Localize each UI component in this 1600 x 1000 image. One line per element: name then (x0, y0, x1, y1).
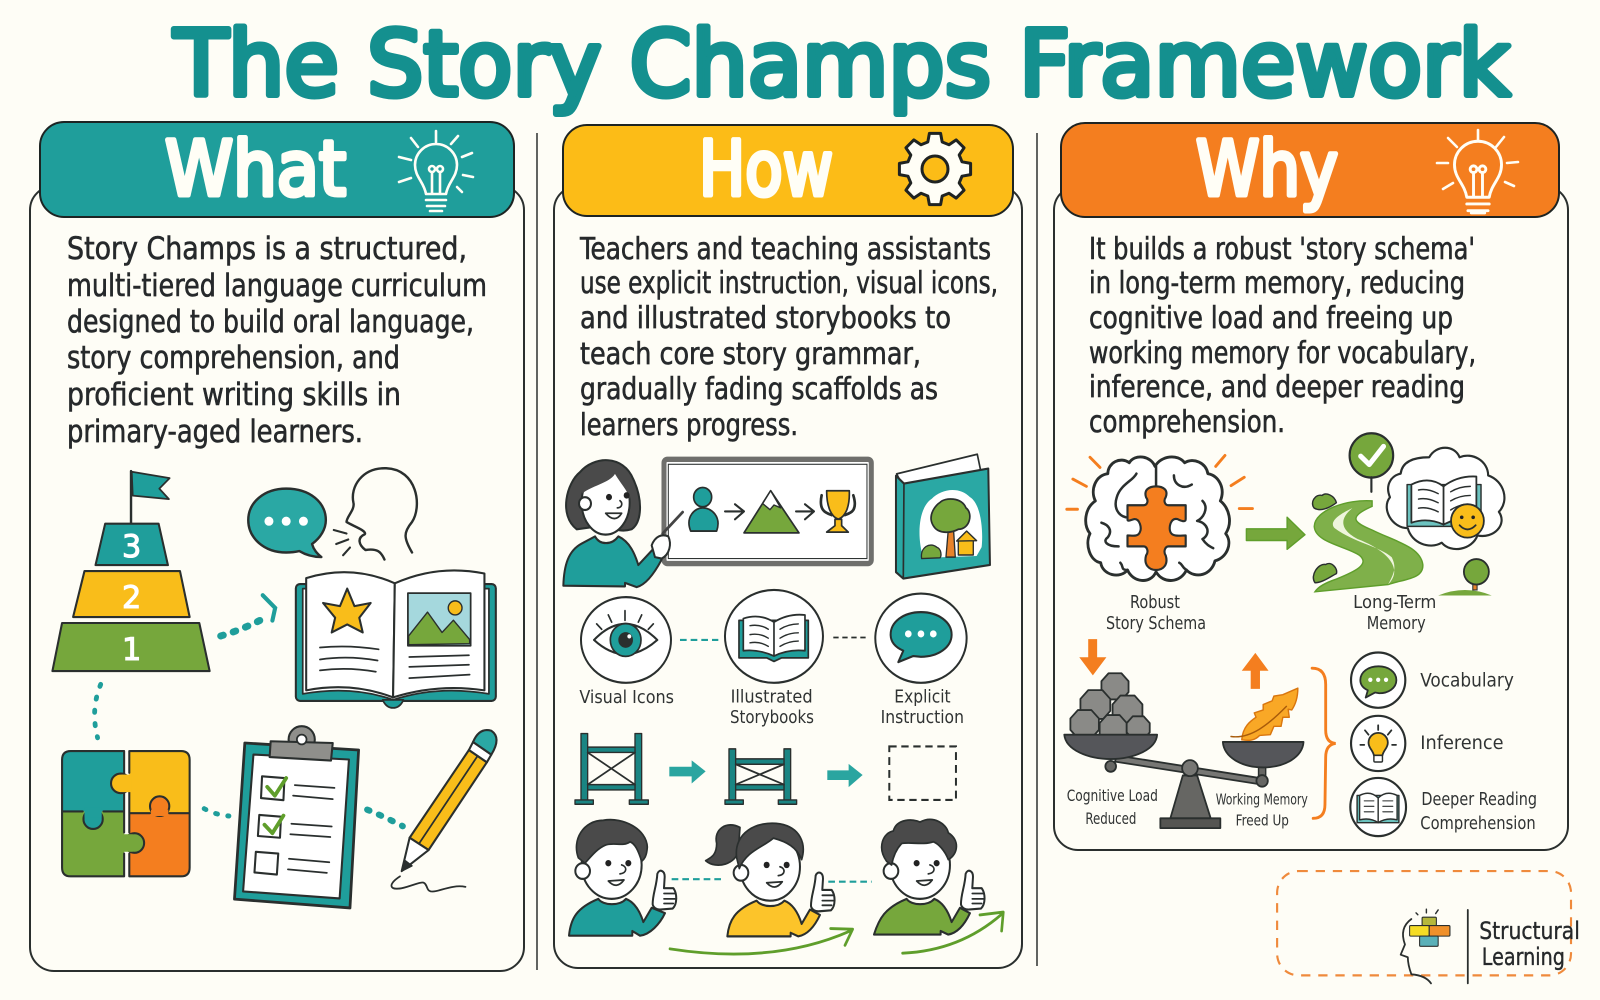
title: The Story Champs Framework (173, 12, 1510, 117)
logo: Structural Learning (1401, 909, 1580, 983)
label: Illustrated Storybooks: Illustrated (731, 687, 813, 708)
icon: puzzle pieces (62, 751, 190, 876)
icon: tiered pyramid with flag: 2 (122, 581, 141, 616)
header: How: How (699, 124, 833, 213)
logo: dashed box (1277, 871, 1571, 975)
header: Why: Why (1196, 124, 1338, 213)
icon: teacher pointing (563, 460, 683, 587)
icon: reading book (1350, 778, 1406, 836)
icon: clipboard checklist (234, 726, 359, 908)
icon: tiered pyramid with flag: 1 (122, 633, 141, 668)
logo: Structural Learning: Learning (1482, 943, 1565, 971)
label: Working Memory Freed Up: Working Memory (1216, 790, 1308, 809)
icon: green check pin (1350, 433, 1393, 492)
arrow: dotted puzzle to clipboard (204, 809, 229, 816)
text block: How description: Teachers and teaching assistants (579, 232, 991, 267)
arrow: scaffold fading 1 (669, 760, 706, 784)
icon: speech bubble in circle (875, 594, 967, 683)
arrow: schema to memory (1246, 517, 1305, 549)
icon: thought cloud with book (1387, 448, 1504, 549)
header: What: What (165, 124, 346, 213)
text block: How description: and illustrated storybooks to (580, 301, 951, 336)
label: Long-Term Memory: Memory (1367, 614, 1426, 634)
icon: pencil (391, 730, 497, 892)
text block: How description: gradually fading scaffolds as (580, 372, 938, 407)
arrow: progress 1 (670, 929, 853, 954)
text block: What description: story comprehension, and (67, 340, 400, 376)
icon: open storybook (296, 570, 496, 708)
header: How (563, 124, 1013, 216)
label: Cognitive Load Reduced: Reduced (1085, 809, 1136, 828)
label: Deeper Reading Comprehension (1420, 789, 1537, 834)
label: Robust Story Schema: Story Schema (1106, 614, 1206, 634)
label: Long-Term Memory: Long-Term (1353, 593, 1436, 613)
icon: child in green (874, 820, 985, 935)
arrow: progress 2 (903, 912, 1003, 953)
label: Working Memory Freed Up: Freed Up (1236, 811, 1289, 830)
text block: Why description: cognitive load and freeing up (1089, 301, 1453, 336)
icon: dashed empty box (889, 746, 956, 800)
text block: Why description: comprehension. (1089, 405, 1285, 440)
icon: story board (664, 459, 871, 564)
label: Explicit Instruction: Explicit (894, 687, 951, 708)
illustrations: Why (1064, 433, 1580, 983)
text block: How description: use explicit instruction, visual icons, (580, 266, 998, 301)
label: Robust Story Schema (1106, 593, 1206, 634)
icon: open book (725, 590, 823, 683)
icon: inference bulb (1351, 716, 1405, 771)
text block: Why description (1089, 232, 1476, 440)
label: Vocabulary: Vocabulary (1420, 670, 1514, 691)
label: Cognitive Load Reduced (1067, 786, 1158, 828)
icon: light bulb (399, 131, 473, 211)
panel: What (30, 122, 524, 971)
arrow: dotted clipboard to pencil (367, 810, 403, 826)
text block: What description: proficient writing skills in (67, 377, 401, 413)
icon: eye (581, 597, 671, 683)
label: Inference: Inference (1420, 733, 1504, 754)
icon: orange brace (1312, 668, 1336, 818)
icon: small tree (1438, 559, 1492, 595)
icon: child in yellow (706, 823, 835, 936)
label: Illustrated Storybooks (730, 687, 814, 728)
text block: What description: multi-tiered language curriculum (67, 268, 487, 304)
text block: How description: teach core story grammar, (580, 337, 921, 372)
icon: child in teal (569, 820, 676, 936)
text block: Why description: It builds a robust 'story schema' (1089, 232, 1475, 267)
text block: How description: learners progress. (580, 408, 798, 443)
icon: reduced scaffold (725, 749, 797, 804)
icon: tiered pyramid with flag: 3 (122, 530, 141, 565)
label: Deeper Reading Comprehension: Deeper Reading (1421, 789, 1537, 810)
text block: What description (67, 231, 487, 450)
icon: vocabulary (1351, 653, 1405, 708)
text block: What description: primary-aged learners. (67, 414, 363, 450)
arrow: scaffold fading 2 (827, 764, 863, 787)
panel: How (554, 124, 1022, 968)
arrow: memory up (1242, 653, 1269, 689)
illustrations: What (52, 468, 497, 908)
icon: gear (899, 133, 971, 205)
label: Long-Term Memory (1353, 593, 1436, 634)
label: Illustrated Storybooks: Storybooks (730, 708, 814, 728)
icon: speech bubble (248, 489, 326, 557)
icon: brain with puzzle piece (1067, 455, 1252, 580)
logo: Structural Learning: Structural (1479, 917, 1580, 945)
label: Cognitive Load Reduced: Cognitive Load (1067, 786, 1158, 805)
text block: What description: designed to build oral language, (67, 304, 474, 340)
text block: Why description: working memory for vocabulary, (1089, 336, 1476, 371)
arrow: dotted pyramid to puzzle (95, 684, 101, 738)
text block: How description (579, 232, 998, 443)
header: What (40, 122, 514, 217)
arrow: dotted pyramid to book (221, 595, 275, 636)
icon: light bulb (1437, 130, 1518, 213)
panel: Why (1054, 123, 1580, 983)
text block: Why description: inference, and deeper reading (1089, 370, 1465, 405)
label: Explicit Instruction (881, 687, 964, 728)
icon: full scaffold (575, 734, 648, 804)
header: Why (1061, 123, 1559, 217)
label: Explicit Instruction: Instruction (881, 708, 964, 728)
text block: Why description: in long-term memory, reducing (1089, 266, 1465, 301)
illustrations: How (563, 454, 1003, 954)
text block: What description: Story Champs is a structured, (67, 231, 467, 267)
label: Working Memory Freed Up (1216, 790, 1308, 830)
icon: winding road (1313, 494, 1423, 592)
label: Robust Story Schema: Robust (1130, 593, 1180, 613)
label: Deeper Reading Comprehension: Comprehension (1420, 813, 1536, 834)
icon: balance scale with rocks and feather (1064, 673, 1304, 828)
icon: speaking head (334, 468, 417, 559)
label: Visual Icons: Visual Icons (579, 688, 674, 708)
icon: illustrated storybook (896, 454, 990, 579)
icon: tiered pyramid with flag (52, 471, 210, 671)
arrow: load down (1079, 639, 1106, 675)
